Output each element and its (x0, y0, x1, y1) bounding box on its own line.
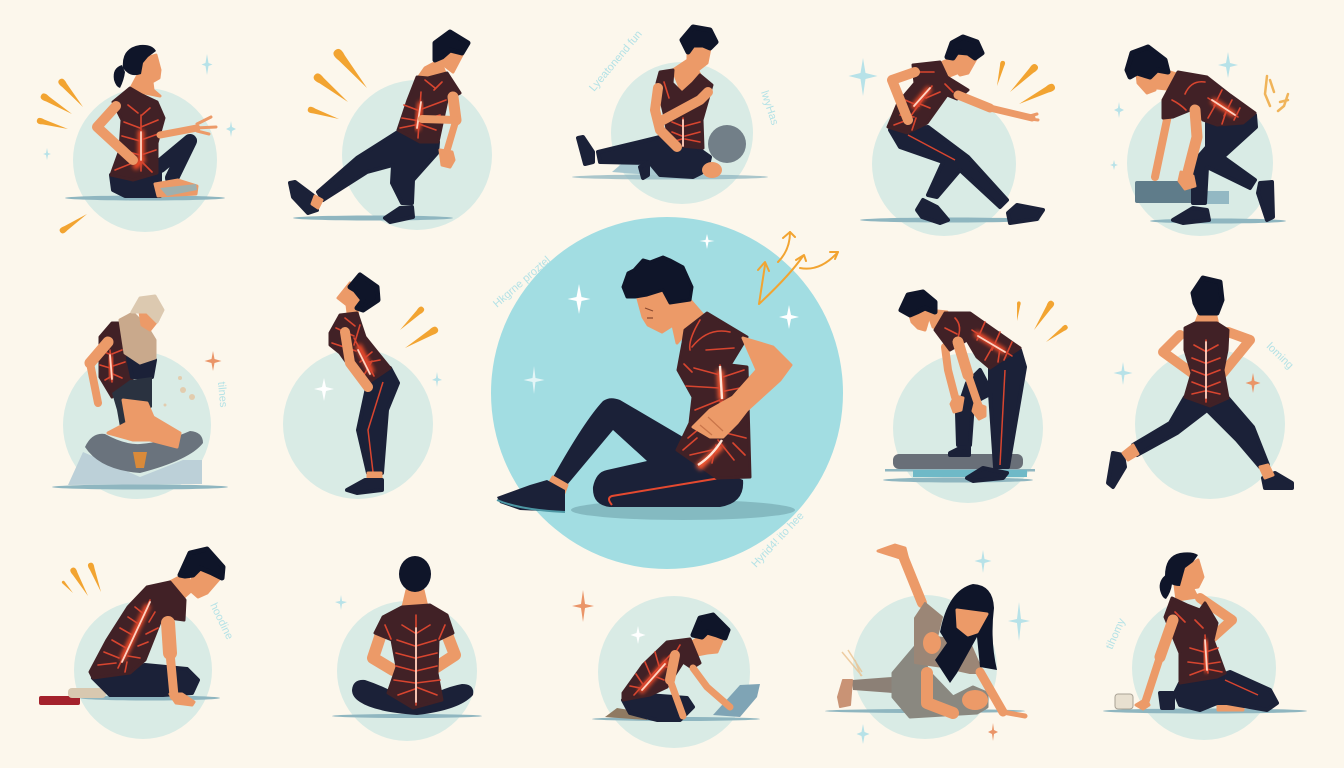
arrows: pain motion (758, 232, 838, 304)
label: side caption: lwyHas (758, 89, 781, 127)
label: side caption: hoodine (207, 601, 235, 642)
figure: long-hair side bend (825, 545, 1030, 744)
figure: kneeling side back view (39, 549, 235, 739)
sparkles (1110, 52, 1238, 170)
rays: pain marks (36, 77, 89, 235)
figure: seated woman looking back (1103, 552, 1307, 740)
caption bottom: Hyrid4! ito hee (749, 510, 807, 570)
neck and face (637, 290, 703, 343)
figure: bent forward on bar (883, 292, 1069, 503)
shoe (497, 480, 565, 512)
sparkle (335, 595, 347, 610)
sparkle (204, 351, 222, 371)
figure: seated woman with ponytail (36, 45, 236, 235)
glowing spine and ribs (683, 320, 746, 468)
legs (553, 398, 743, 507)
label: side caption: tilnes (215, 381, 229, 408)
shirt (677, 313, 750, 478)
figure: standing arching back (283, 275, 442, 499)
rays: pain marks (398, 305, 439, 351)
caption top: Hkgrne proztel (491, 254, 553, 310)
sparkles (314, 372, 442, 401)
rays: pain marks (1015, 300, 1069, 344)
sparkle (848, 58, 878, 96)
figure: side lunge leaning (290, 32, 492, 230)
figure: blond figure on bolster (52, 296, 229, 499)
sparkles (524, 234, 799, 394)
sparkles (856, 550, 1030, 744)
rays: pain marks (1265, 76, 1288, 111)
hair (623, 257, 692, 303)
arm holding back (693, 338, 791, 437)
rays: pain marks (995, 60, 1056, 107)
rays: pain marks (307, 47, 371, 122)
figure: lunge reaching forward (848, 37, 1056, 236)
sparkle (572, 590, 594, 622)
label: curved caption: Lyeatonend fun (587, 28, 645, 94)
figure: bending lifting box (1110, 47, 1288, 236)
figure: cross-legged back view (332, 556, 482, 741)
central figure: seated person holding lower back (491, 217, 843, 570)
figure: standing lunge from behind (1108, 278, 1296, 499)
rays: pain marks (61, 562, 104, 598)
sparkles (1114, 362, 1260, 393)
label: side caption: tihomy (1104, 616, 1128, 651)
ground shadow (571, 500, 795, 520)
figure: crouching at laptop (572, 590, 760, 748)
figure: seated with ball (572, 27, 781, 204)
sparkles (43, 54, 236, 160)
label: side caption: loming (1264, 341, 1296, 372)
scattered dust (164, 376, 195, 406)
scattered dust (842, 650, 862, 676)
